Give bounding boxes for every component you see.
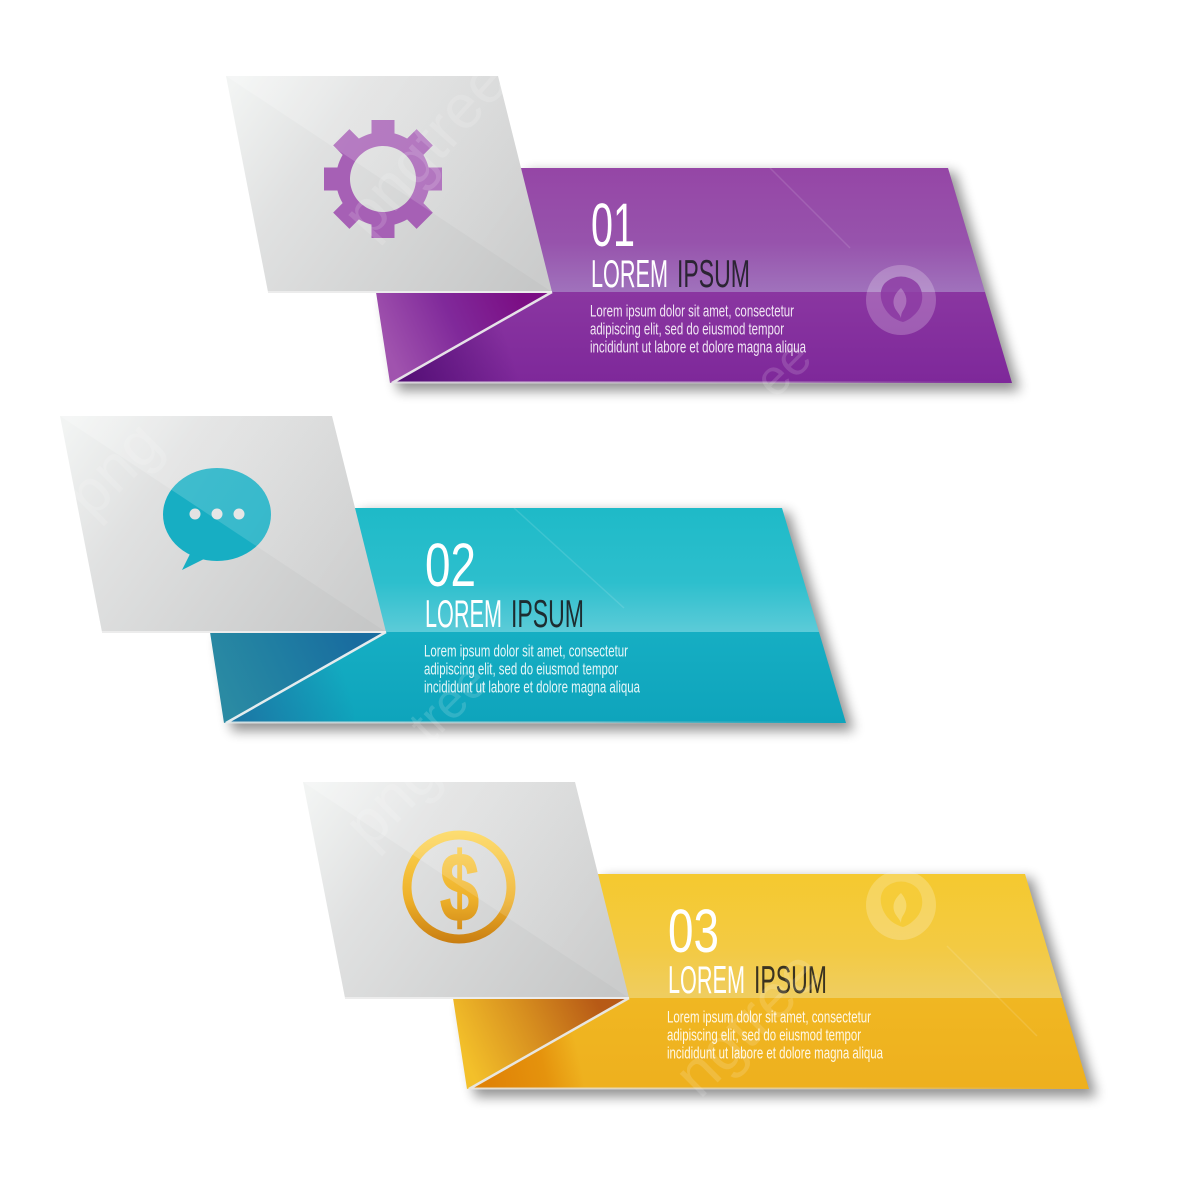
card bottom edge <box>102 631 386 633</box>
watermark: pngtree marks: ngtree <box>661 937 834 1110</box>
body text: incididunt ut labore et dolore magna aliqua <box>424 678 640 696</box>
heading: IPSUM <box>754 959 827 1002</box>
heading: IPSUM <box>511 593 584 636</box>
heading: LOREM <box>425 593 502 636</box>
body text: adipiscing elit, sed do eiusmod tempor <box>667 1026 861 1044</box>
ribbon light streak <box>514 508 624 608</box>
watermark: pngtree marks: png <box>53 408 175 530</box>
card glass highlight <box>226 76 552 292</box>
panel: step 03 yellow <box>303 782 1097 1097</box>
ribbon dark fold shade <box>230 632 386 723</box>
panel: step 01 purple <box>226 76 1020 391</box>
ribbon light streak <box>947 946 1037 1036</box>
step number: 01 <box>591 191 635 259</box>
ribbon lower band <box>396 292 1012 383</box>
icon: speech bubble <box>163 468 271 570</box>
folded flap <box>376 292 552 383</box>
ribbon lower band <box>230 632 846 723</box>
card glass highlight <box>303 782 629 998</box>
watermark: leaf badge <box>866 265 936 335</box>
body text <box>424 642 640 696</box>
ribbon upper band <box>339 508 819 632</box>
watermark: pngtree marks: pngtree <box>329 47 521 249</box>
folded flap <box>210 632 386 723</box>
icon: gear <box>324 120 442 238</box>
card bottom edge <box>268 291 552 293</box>
panel: step 02 teal <box>60 416 854 731</box>
fold crease <box>392 292 552 383</box>
step number: 02 <box>425 531 476 599</box>
fold crease <box>469 998 629 1089</box>
body text <box>590 302 806 356</box>
watermark: pngtree marks: tree <box>398 652 499 753</box>
bottom edge highlight <box>393 382 1000 384</box>
ribbon upper band <box>505 168 985 292</box>
icon: dollar coin <box>407 832 511 942</box>
body text: adipiscing elit, sed do eiusmod tempor <box>424 660 618 678</box>
ribbon shadow <box>384 172 1020 391</box>
ribbon lower band <box>473 998 1089 1089</box>
ribbon upper band <box>582 874 1062 998</box>
heading: LOREM <box>668 959 745 1002</box>
heading: IPSUM <box>677 253 750 296</box>
body text: Lorem ipsum dolor sit amet, consectetur <box>424 642 628 660</box>
body text: adipiscing elit, sed do eiusmod tempor <box>590 320 784 338</box>
body text: Lorem ipsum dolor sit amet, consectetur <box>667 1008 871 1026</box>
ribbon shadow <box>218 512 854 731</box>
card bottom edge <box>345 997 629 999</box>
step number: 03 <box>668 897 719 965</box>
watermark: leaf badge on yellow ribbon <box>866 870 936 940</box>
icon: dollar coin: $ <box>440 832 479 942</box>
bottom edge highlight <box>470 1088 1077 1090</box>
ribbon light streak <box>770 168 850 248</box>
fold crease <box>226 632 386 723</box>
watermark: pngtree marks <box>53 47 834 1110</box>
body text: Lorem ipsum dolor sit amet, consectetur <box>590 302 794 320</box>
ribbon shadow <box>461 878 1097 1097</box>
card glass highlight <box>60 416 386 632</box>
body text: incididunt ut labore et dolore magna aliqua <box>590 338 806 356</box>
grey card <box>226 76 552 292</box>
ribbon dark fold shade <box>473 998 629 1089</box>
heading: LOREM <box>591 253 668 296</box>
bottom edge highlight <box>227 722 834 724</box>
folded flap <box>453 998 629 1089</box>
ribbon dark fold shade <box>396 292 552 383</box>
grey card <box>303 782 629 998</box>
body text <box>667 1008 883 1062</box>
body text: incididunt ut labore et dolore magna aliqua <box>667 1044 883 1062</box>
grey card <box>60 416 386 632</box>
watermark: pngtree marks: ee <box>743 329 822 408</box>
watermark: pngtree marks: png <box>331 738 453 860</box>
